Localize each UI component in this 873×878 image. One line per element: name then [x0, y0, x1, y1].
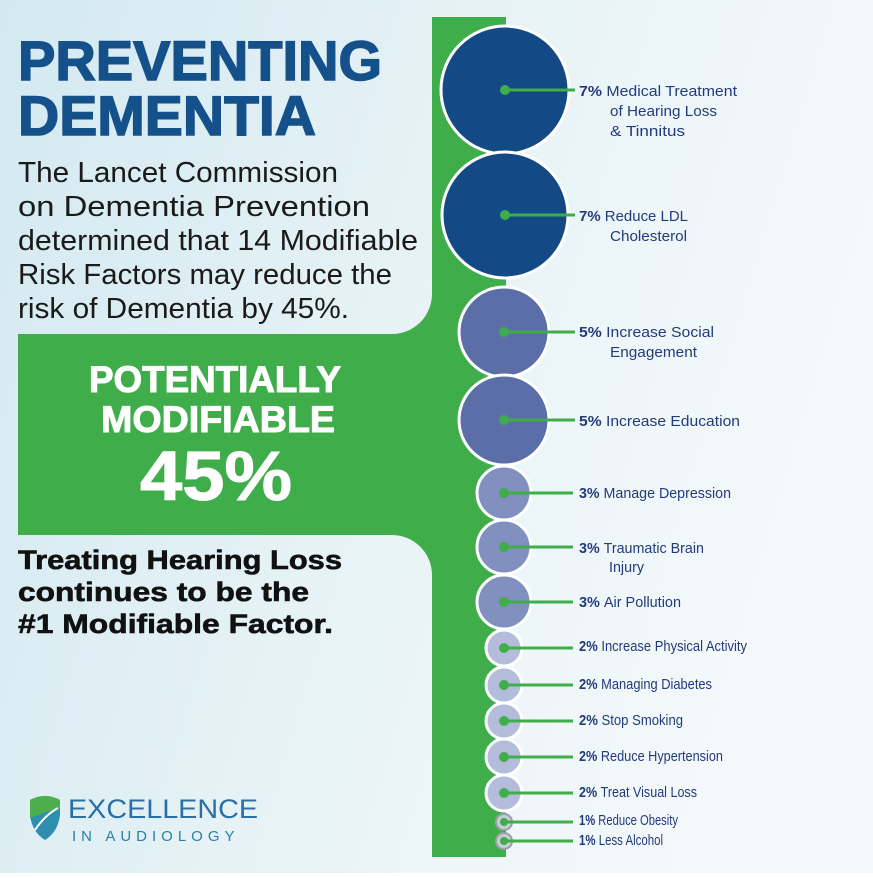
- bubble chart of risk factors: Injury: [609, 559, 644, 576]
- callout: potentially modifiable 45%: POTENTIALLY: [89, 359, 341, 400]
- title: PREVENTING: [18, 29, 382, 92]
- green connector shape: [18, 17, 506, 857]
- title: [18, 29, 382, 147]
- intro text: on Dementia Prevention: [18, 191, 370, 223]
- bubble chart of risk factors: 2% Increase Physical Activity: [579, 638, 747, 655]
- bubble chart of risk factors: 2% Stop Smoking: [579, 712, 683, 729]
- callout: potentially modifiable 45%: [89, 359, 341, 515]
- bubble chart of risk factors: 1% Reduce Obesity: [579, 812, 678, 829]
- bubble chart of risk factors: 1% Less Alcohol: [579, 832, 663, 849]
- bubble chart of risk factors: 7% Reduce LDL: [579, 208, 688, 225]
- callout: potentially modifiable 45%: MODIFIABLE: [101, 399, 335, 440]
- bubble chart of risk factors: 2% Treat Visual Loss: [579, 784, 697, 801]
- intro text: The Lancet Commission: [18, 157, 338, 189]
- key message: [18, 545, 342, 639]
- logo: IN AUDIOLOGY: [72, 828, 240, 845]
- logo: [30, 794, 258, 845]
- bubble chart of risk factors: 2% Reduce Hypertension: [579, 748, 723, 765]
- key message: continues to be the: [18, 577, 309, 607]
- callout: potentially modifiable 45%: 45%: [140, 437, 292, 515]
- intro text: risk of Dementia by 45%.: [18, 293, 349, 325]
- bubble chart of risk factors: 3% Traumatic Brain: [579, 540, 704, 557]
- title: DEMENTIA: [18, 84, 316, 147]
- bubble chart of risk factors: [441, 26, 747, 849]
- key message: Treating Hearing Loss: [18, 545, 342, 575]
- intro text: determined that 14 Modifiable: [18, 225, 418, 257]
- key message: #1 Modifiable Factor.: [18, 609, 333, 639]
- bubble chart of risk factors: 5% Increase Education: [579, 413, 740, 430]
- intro text: [18, 157, 418, 325]
- bubble chart of risk factors: Cholesterol: [610, 228, 687, 245]
- intro text: Risk Factors may reduce the: [18, 259, 392, 291]
- bubble chart of risk factors: 7% Medical Treatment: [579, 83, 738, 100]
- bubble chart of risk factors: of Hearing Loss: [610, 103, 717, 120]
- logo: EXCELLENCE: [68, 794, 258, 824]
- bubble chart of risk factors: 3% Manage Depression: [579, 485, 731, 502]
- bubble chart of risk factors: Engagement: [610, 344, 698, 361]
- bubble chart of risk factors: 2% Managing Diabetes: [579, 676, 712, 693]
- bubble chart of risk factors: 5% Increase Social: [579, 324, 714, 341]
- bubble chart of risk factors: 3% Air Pollution: [579, 594, 681, 611]
- bubble chart of risk factors: & Tinnitus: [610, 123, 685, 140]
